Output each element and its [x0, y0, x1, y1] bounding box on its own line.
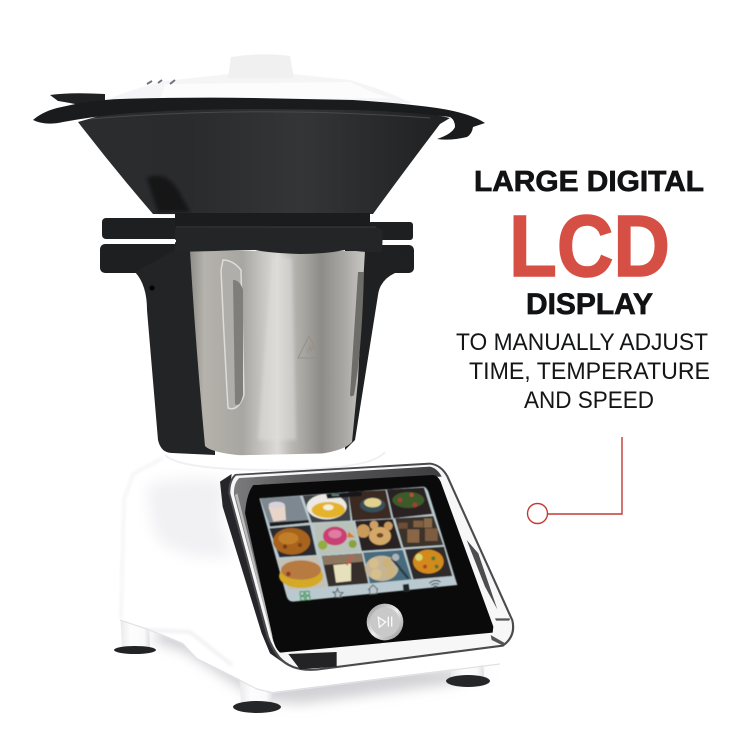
recipe tile: salads and dips — [313, 522, 360, 555]
recipe tile: baking and sweets — [395, 516, 443, 548]
locking collar band — [102, 213, 383, 254]
recipe tile: meals — [269, 525, 317, 557]
description text: TO MANUALLY ADJUST — [456, 329, 708, 356]
steaming bowl — [78, 103, 450, 214]
heading: LARGE DIGITAL: LARGE DIGITAL — [474, 166, 704, 198]
right foot — [446, 660, 490, 687]
description text: TIME, TEMPERATURE — [469, 358, 710, 385]
recipe tile: drinks — [322, 553, 368, 587]
recipe tile: breads — [355, 519, 402, 551]
black jug body — [135, 245, 414, 455]
chrome bezel — [220, 463, 514, 671]
icon: hot surface warning triangle — [298, 336, 320, 358]
recipe tile: dips and sauces — [326, 490, 392, 521]
control panel — [220, 463, 514, 671]
product: multifunction cooker — [33, 54, 515, 713]
bowl rim and handles — [33, 98, 485, 140]
touchscreen — [259, 487, 457, 602]
stainless steel jug — [190, 251, 365, 457]
description text — [456, 329, 710, 414]
lid knob and dome — [103, 54, 412, 106]
recipe tile: smoothie — [260, 496, 309, 527]
recipe tile: soups — [303, 493, 351, 523]
recipe tile: rolls — [363, 550, 412, 583]
recipe tile: desserts — [277, 557, 327, 590]
heading: LCD: LCD — [509, 198, 670, 295]
start/pause button — [367, 604, 403, 640]
back left foot — [114, 612, 156, 654]
icon row: grid, star, home, timer, wifi — [300, 580, 441, 600]
recipe tile: vegetarian — [405, 547, 452, 579]
collar handles — [100, 218, 414, 273]
white base body — [120, 452, 515, 693]
front foot — [233, 672, 281, 713]
description text: AND SPEED — [524, 387, 654, 414]
black glass panel — [245, 475, 493, 653]
lid latch — [50, 93, 105, 105]
ground shadow — [150, 625, 490, 704]
callout line with circle marker — [528, 437, 622, 524]
heading: DISPLAY: DISPLAY — [526, 288, 653, 321]
recipe tile: salads — [387, 487, 432, 518]
